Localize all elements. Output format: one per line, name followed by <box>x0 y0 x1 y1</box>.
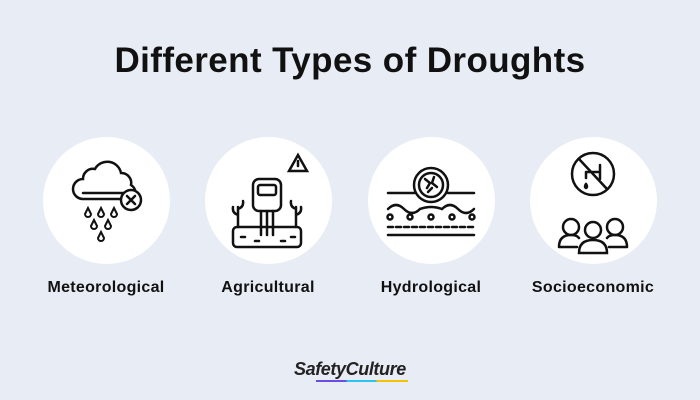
icon: dry groundwater <box>388 168 474 235</box>
label: socioeconomic: Socioeconomic <box>532 279 654 296</box>
label: hydrological: Hydrological <box>381 279 481 296</box>
title: Different Types of Droughts <box>114 41 586 80</box>
icon: cloud with x <box>73 162 141 241</box>
icon: soil meter with warning <box>233 155 307 247</box>
panel: meteorological <box>43 137 170 264</box>
icon: no water tap and people <box>559 153 627 253</box>
panel: agricultural <box>205 137 332 264</box>
logo: SafetyCulture: SafetyCulture <box>294 359 406 379</box>
label: meteorological: Meteorological <box>47 279 165 296</box>
panel: hydrological <box>368 137 495 264</box>
panel: socioeconomic <box>530 137 657 264</box>
label: agricultural: Agricultural <box>221 279 315 296</box>
